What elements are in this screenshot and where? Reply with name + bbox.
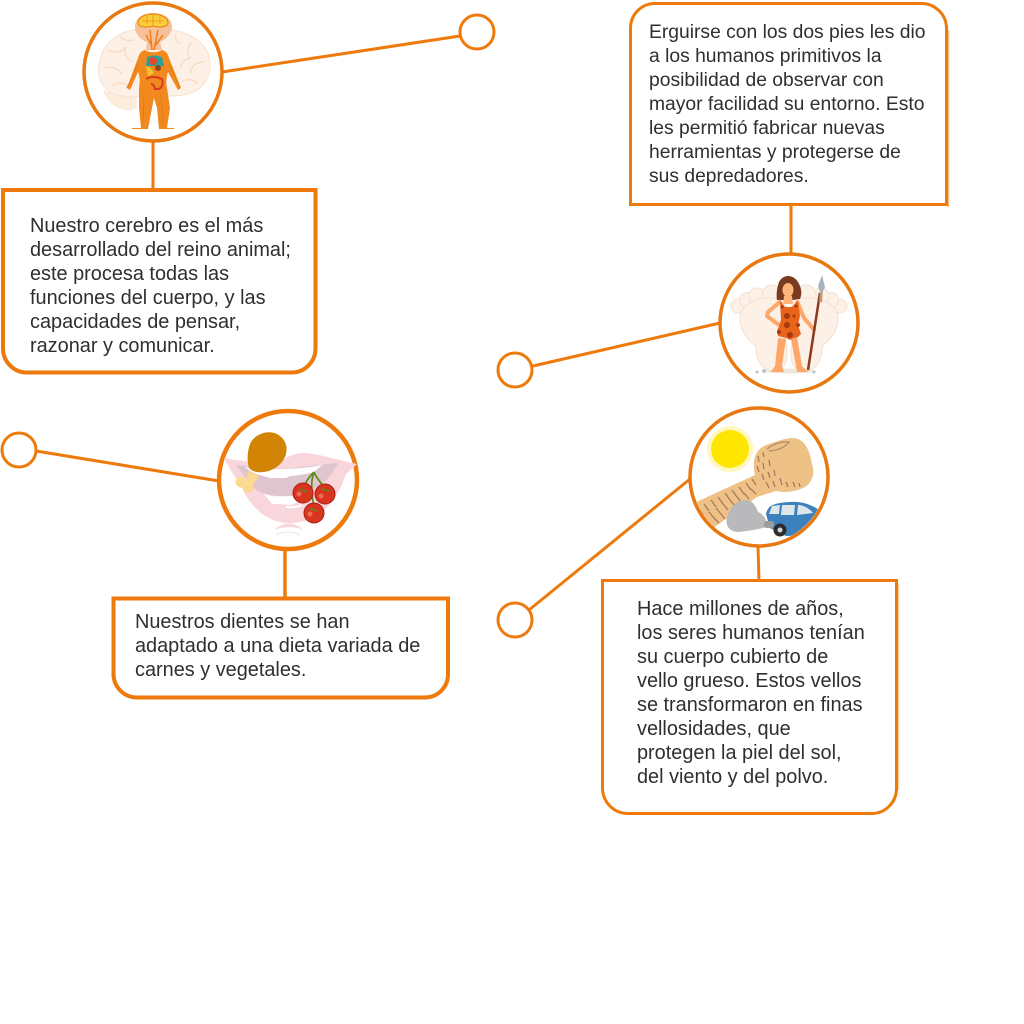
panel: bipedalism text box <box>630 3 948 207</box>
text: teeth description: adaptado a una dieta variada de <box>135 635 420 657</box>
icon: mouth with chicken leg and tomatoes <box>219 411 357 549</box>
text: teeth description: carnes y vegetales. <box>135 659 306 681</box>
panel: body hair text box <box>602 580 898 814</box>
text: bipedalism description: les permitió fabricar nuevas <box>649 118 885 139</box>
text: bipedalism description: herramientas y protegerse de <box>649 142 901 163</box>
connector: teeth to open circle <box>36 451 285 598</box>
icon: woman with spear over feet <box>720 254 858 392</box>
text: body hair description: se transformaron en finas <box>637 694 863 716</box>
text: brain description: este procesa todas las <box>30 263 229 285</box>
text: bipedalism description: Erguirse con los dos pies les dio <box>649 22 926 43</box>
text: brain description: funciones del cuerpo, y las <box>30 287 266 309</box>
text: body hair description: los seres humanos tenían <box>637 622 865 644</box>
panel: teeth text box <box>114 598 448 698</box>
text: teeth description: Nuestros dientes se han <box>135 611 350 633</box>
text: body hair description: Hace millones de años, <box>637 598 844 620</box>
text: body hair description: protegen la piel del sol, <box>637 742 842 764</box>
connector: brain to open circle <box>153 36 460 190</box>
icon: brain and human body <box>84 3 222 141</box>
text: body hair description: vello grueso. Estos vellos <box>637 670 861 692</box>
text: bipedalism description: a los humanos primitivos la <box>649 46 882 67</box>
text: brain description: desarrollado del reino animal; <box>30 239 291 261</box>
text: brain description: Nuestro cerebro es el más <box>30 215 263 237</box>
text: bipedalism description: sus depredadores. <box>649 166 809 187</box>
text: bipedalism description: mayor facilidad su entorno. Esto <box>649 94 924 115</box>
text: body hair description: vellosidades, que <box>637 718 791 740</box>
connector: feet to open circle <box>533 205 791 366</box>
text: body hair description: su cuerpo cubierto de <box>637 646 828 668</box>
connector: hair to open circle <box>529 479 759 610</box>
text: brain description: capacidades de pensar, <box>30 311 240 333</box>
marker: open circle lower <box>498 603 532 637</box>
icon: hairy arm, sun and car <box>690 408 828 546</box>
marker: open circle left <box>2 433 36 467</box>
panel: brain text box <box>3 190 316 373</box>
text: body hair description: del viento y del polvo. <box>637 766 828 788</box>
marker: open circle middle right <box>498 353 532 387</box>
text: brain description: razonar y comunicar. <box>30 335 215 357</box>
marker: open circle top <box>460 15 494 49</box>
text: bipedalism description: posibilidad de observar con <box>649 70 884 91</box>
